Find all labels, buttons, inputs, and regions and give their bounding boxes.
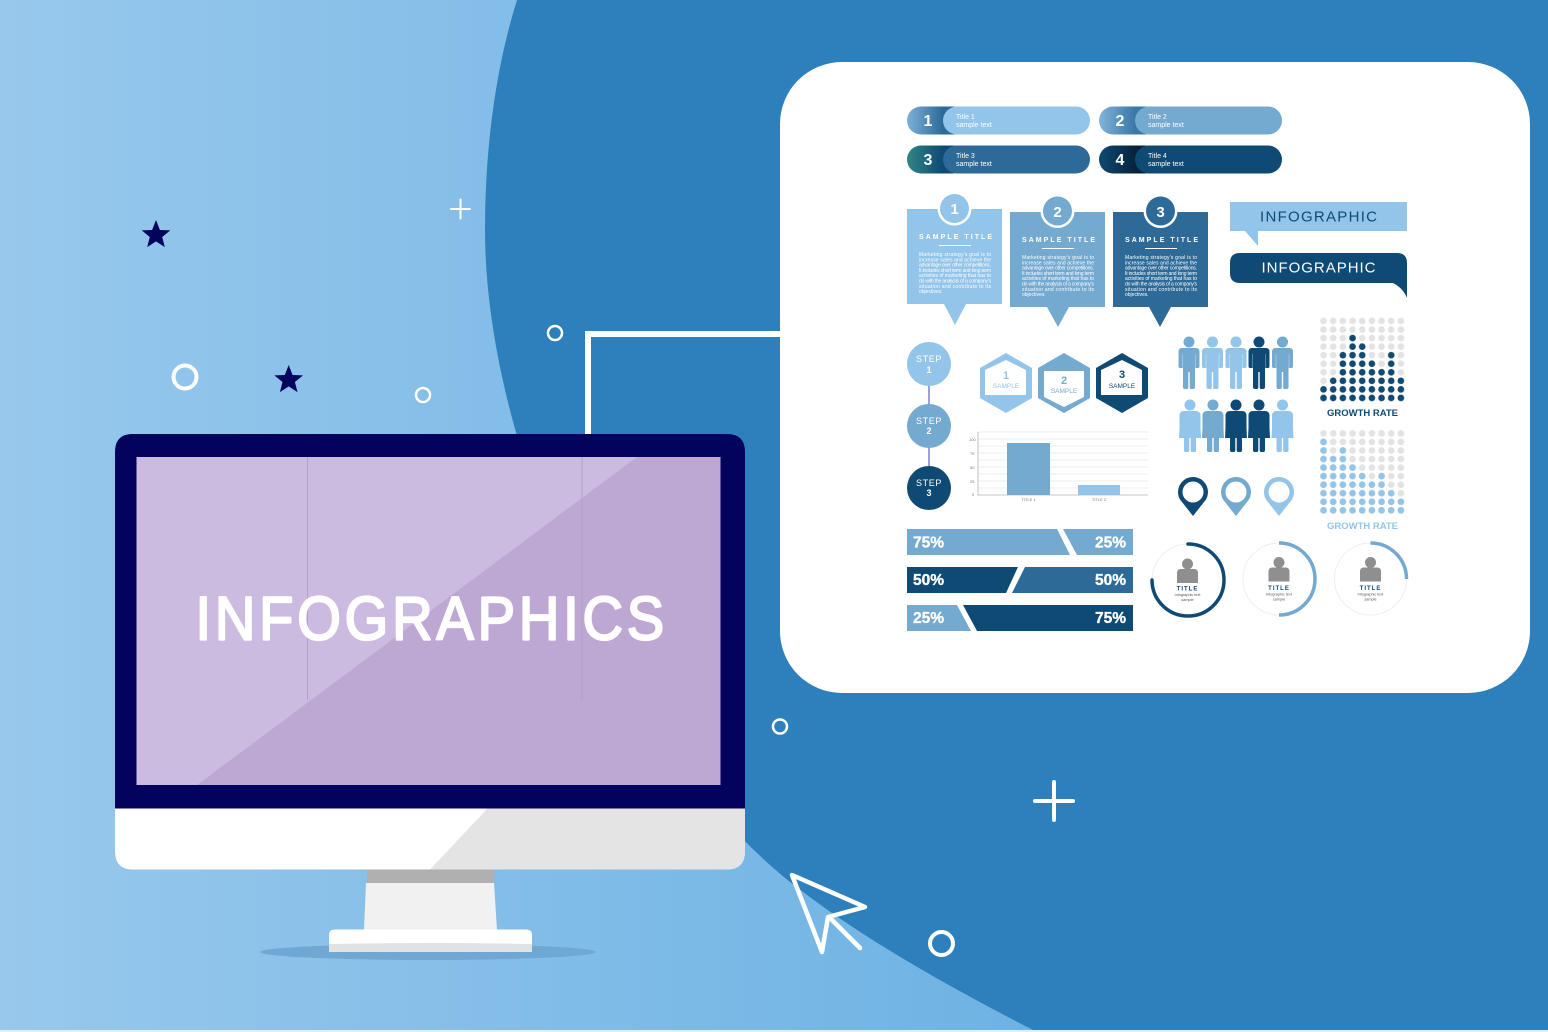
- white card: [780, 62, 1530, 693]
- bar: title 2: [1078, 485, 1120, 495]
- people row: men: [1178, 336, 1293, 389]
- pill 4: sample text: [1148, 161, 1184, 168]
- monitor chin shade: [430, 808, 745, 870]
- callout card 1: [907, 192, 1002, 325]
- callout card 3: 3: [1156, 204, 1165, 221]
- pill 4: 4: [1116, 152, 1125, 169]
- dot chart: growth rate dark: [1319, 317, 1406, 419]
- step connector: [928, 380, 930, 470]
- numbered pills: [907, 106, 1282, 174]
- monitor screen: [136, 457, 720, 785]
- bar 25/75: 75%: [1095, 610, 1126, 627]
- callout card 3: increase sales and achieve the: [1125, 260, 1197, 266]
- icon: ring: [773, 720, 787, 734]
- icon: plus: [1035, 782, 1073, 820]
- bar 25/75: [907, 605, 1133, 631]
- icon: star: [274, 365, 303, 392]
- bar chart: 75: [970, 451, 975, 456]
- donut: 50 percent: TITLE: [1268, 586, 1290, 592]
- hexagon badge 3: [1096, 353, 1148, 413]
- icon: star: [142, 220, 170, 247]
- dot chart: growth rate dark: GROWTH RATE: [1327, 408, 1398, 419]
- bar chart: 50: [970, 465, 975, 470]
- bottom edge line: [0, 1030, 1548, 1032]
- callout card 2: do with the analysis of a company's: [1022, 282, 1094, 288]
- callout card 3: do with the analysis of a company's: [1125, 282, 1198, 288]
- donut: 25 percent: [1334, 543, 1406, 615]
- connector line: [588, 334, 782, 436]
- callout card 2: Marketing strategy's goal is to: [1022, 255, 1094, 261]
- bar 75/25: [907, 529, 1133, 555]
- monitor base: [329, 930, 532, 952]
- callout card 3: [1113, 194, 1208, 327]
- bar chart: 100: [969, 437, 976, 442]
- hexagon badge 2: SAMPLE: [1051, 388, 1078, 395]
- screen guide lines: [308, 457, 582, 700]
- map pins: [1178, 477, 1294, 516]
- dot chart: growth rate light: GROWTH RATE: [1327, 521, 1398, 532]
- donut: 25 percent: Infographic text: [1358, 592, 1384, 596]
- ribbon: light: [1230, 202, 1407, 246]
- callout card 1: Marketing strategy's goal is to: [919, 252, 991, 258]
- dark blue curved shape: [485, 0, 1548, 1032]
- callout card 1: do with the analysis of a company's: [919, 278, 992, 284]
- monitor neck: [367, 869, 494, 883]
- callout card 3: SAMPLE TITLE: [1125, 237, 1198, 244]
- icon: ring: [548, 326, 562, 340]
- pill 3: [907, 146, 1090, 174]
- monitor chin: [115, 806, 745, 870]
- callout card 2: activities of marketing that has to: [1022, 276, 1094, 282]
- bar chart: TITLE 2: [1092, 497, 1107, 502]
- donut: 50 percent: [1243, 543, 1315, 615]
- step timeline: [907, 342, 951, 510]
- step 2: [907, 404, 951, 448]
- hexagon badge 1: SAMPLE: [993, 383, 1020, 390]
- callout card 2: It includes short term and long term: [1022, 271, 1094, 277]
- percentage bars: [907, 529, 1133, 631]
- callout card 1: situation and contribute to its: [919, 284, 992, 290]
- callout card 2: 2: [1053, 204, 1062, 221]
- pill 1: Title 1: [956, 114, 975, 121]
- callout card 1: It includes short term and long term: [919, 268, 991, 274]
- callout card 1: 1: [950, 201, 959, 218]
- pill 2: 2: [1116, 113, 1125, 130]
- callout card 1: activities of marketing that has to: [919, 273, 991, 279]
- bar chart: TITLE 1: [1021, 497, 1036, 502]
- icon: plus: [451, 200, 470, 218]
- step 3: 3: [926, 488, 932, 498]
- hexagon badge 2: 2: [1061, 375, 1067, 387]
- callout card 1: SAMPLE TITLE: [919, 234, 992, 241]
- screen diagonal shade: [197, 457, 720, 785]
- ribbon: light: INFOGRAPHIC: [1260, 208, 1377, 226]
- bar 50/50: [907, 567, 1133, 593]
- donut: 75 percent: sample: [1181, 598, 1194, 602]
- icon: ring: [416, 388, 430, 402]
- panel: infographic elements: [780, 62, 1530, 693]
- bar chart: [969, 432, 1148, 502]
- ribbon: dark: INFOGRAPHIC: [1262, 260, 1376, 276]
- icon: cursor arrow: [792, 875, 865, 952]
- callout card 2: situation and contribute to its: [1022, 287, 1094, 293]
- donut: 50 percent: Infographic text: [1266, 592, 1293, 596]
- callout card 3: situation and contribute to its: [1125, 287, 1198, 293]
- pill 4: [1099, 146, 1282, 174]
- desktop monitor: [115, 434, 745, 960]
- bar 50/50: 50%: [913, 572, 944, 589]
- pill 4: Title 4: [1148, 153, 1167, 160]
- decorative stars and rings: [142, 200, 1073, 955]
- callout card 3: Marketing strategy's goal is to: [1125, 255, 1197, 261]
- monitor shadow: [260, 944, 596, 960]
- icon: ring: [174, 366, 196, 388]
- hexagon badge 2: [1038, 353, 1090, 413]
- callout card 2: SAMPLE TITLE: [1022, 237, 1095, 244]
- monitor base shade: [329, 943, 532, 952]
- pill 1: 1: [924, 113, 933, 130]
- step 1: STEP: [916, 354, 942, 364]
- pill 2: Title 2: [1148, 114, 1167, 121]
- pill 2: sample text: [1148, 122, 1184, 129]
- monitor stand: [364, 883, 497, 930]
- donut: 25 percent: sample: [1364, 598, 1377, 602]
- ribbon: dark: [1230, 253, 1407, 298]
- callout card 3: objectives.: [1125, 292, 1149, 298]
- screen title: INFOGRAPHICS: [196, 585, 664, 653]
- bar: title 1: [1007, 443, 1050, 495]
- monitor bezel: [115, 434, 745, 808]
- pill 2: [1099, 106, 1282, 134]
- callout card 2: objectives.: [1022, 292, 1046, 298]
- bar chart: 0: [972, 492, 975, 497]
- step 2: STEP: [916, 416, 942, 426]
- step 1: [907, 342, 951, 386]
- callout card 3: activities of marketing that has to: [1125, 276, 1197, 282]
- donut: 50 percent: sample: [1273, 598, 1285, 602]
- dot chart: growth rate light: [1319, 429, 1406, 532]
- pill 3: sample text: [956, 161, 992, 168]
- donut: 75 percent: TITLE: [1177, 586, 1198, 592]
- callout card 2: increase sales and achieve the: [1022, 260, 1094, 266]
- callout card 3: It includes short term and long term: [1125, 271, 1197, 277]
- people row: women: [1179, 400, 1294, 452]
- callout card 1: advantage over other competitions.: [919, 263, 991, 269]
- bar 50/50: 50%: [1095, 572, 1126, 589]
- pill 1: [907, 106, 1090, 134]
- donut: 75 percent: [1152, 544, 1224, 616]
- pill 1: sample text: [956, 122, 992, 129]
- step 1: 1: [926, 365, 932, 375]
- hexagon badge 1: [980, 353, 1032, 413]
- bar 75/25: 25%: [1095, 534, 1126, 552]
- callout card 2: advantage over other competitions.: [1022, 266, 1094, 272]
- bar chart: 25: [970, 479, 975, 484]
- callout card 2: [1010, 194, 1105, 327]
- donut: 25 percent: TITLE: [1360, 586, 1381, 592]
- bar 75/25: 75%: [913, 534, 944, 552]
- hexagon badge 1: 1: [1003, 370, 1009, 382]
- step 2: 2: [926, 426, 932, 436]
- donut: 75 percent: Infographic text: [1175, 593, 1201, 597]
- callout card 3: advantage over other competitions.: [1125, 266, 1197, 272]
- hexagon badge 3: 3: [1119, 369, 1125, 381]
- callout card 1: increase sales and achieve the: [919, 257, 991, 263]
- step 3: STEP: [916, 478, 942, 488]
- callout card 1: objectives.: [919, 289, 943, 295]
- hexagon badge 3: SAMPLE: [1109, 383, 1136, 390]
- pill 3: Title 3: [956, 153, 975, 160]
- icon: ring: [930, 932, 953, 955]
- step 3: [907, 466, 951, 510]
- pill 3: 3: [924, 152, 933, 169]
- bar 25/75: 25%: [913, 610, 944, 627]
